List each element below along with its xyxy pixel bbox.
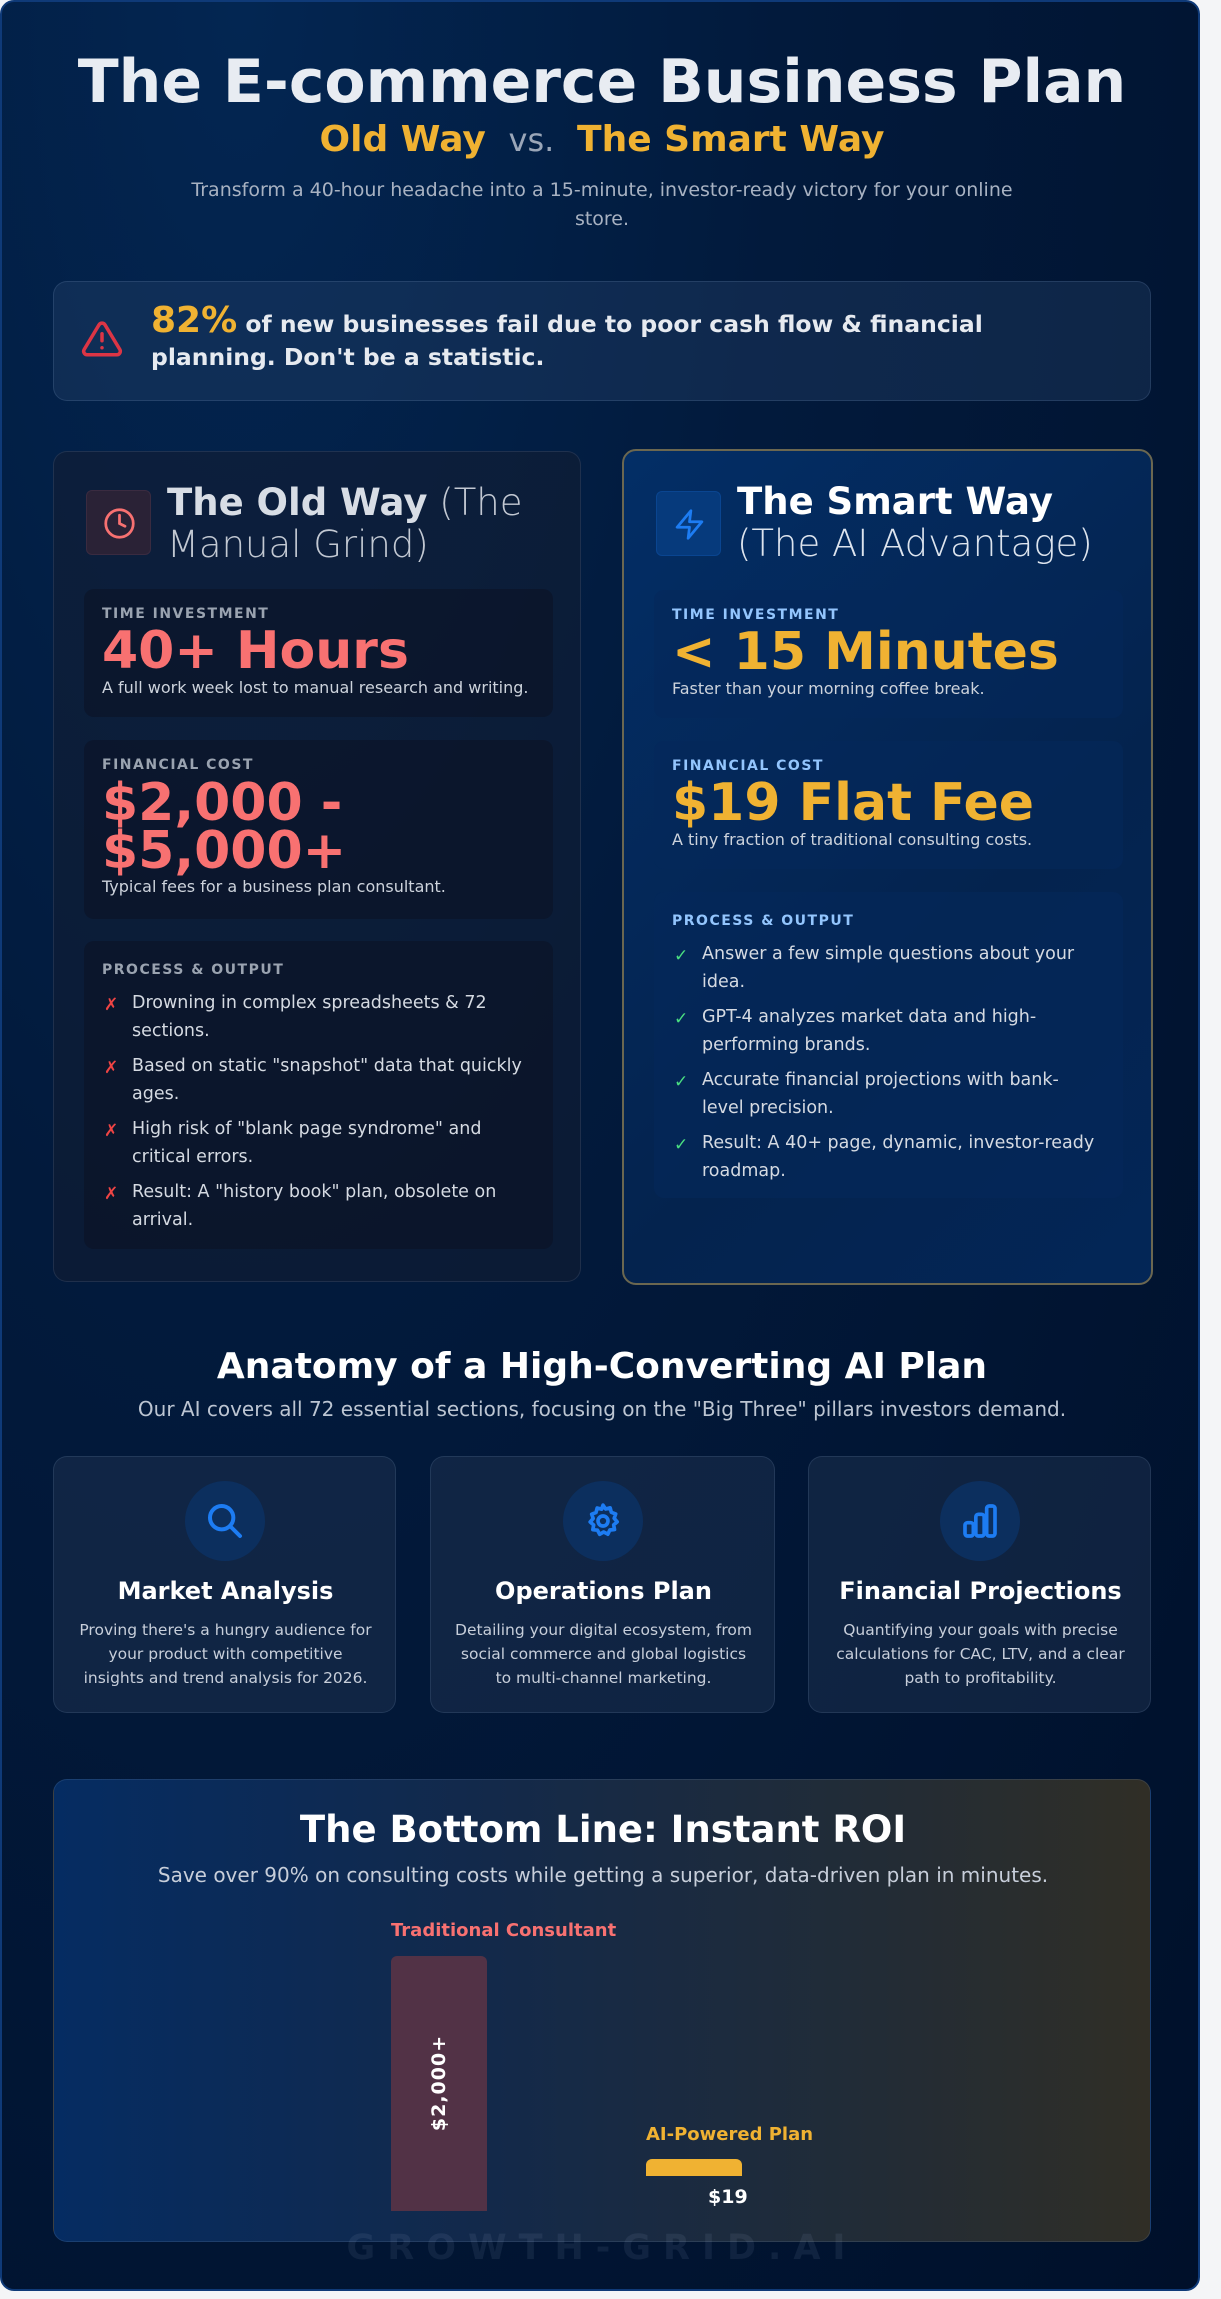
time investment box smart: TIME INVESTMENT — [672, 607, 839, 623]
watermark: GROWTH-GRID.AI — [347, 2228, 857, 2268]
bar: traditional consultant — [391, 1920, 616, 2211]
process list old: ✗ — [104, 995, 118, 1015]
card: financial projections: Financial Projections — [839, 1577, 1122, 1605]
process list old: ✗ — [104, 1058, 118, 1078]
icon: lightning — [656, 491, 721, 556]
financial cost box: FINANCIAL COST — [102, 757, 254, 773]
card: operations plan: Detailing your digital ecosystem, from social commerce and global logistics to multi-channel marketing. — [455, 1621, 752, 1687]
process list old: PROCESS & OUTPUT — [102, 962, 284, 978]
financial cost box smart — [654, 741, 1123, 869]
ROI subtitle: Save over 90% on consulting costs while getting a superior, data-driven plan in minutes. — [158, 1863, 1048, 1887]
process list old: Based on static "snapshot" data that quickly ages. — [132, 1056, 522, 1104]
bar chart — [391, 1920, 813, 2211]
time investment box: A full work week lost to manual research and writing. — [102, 678, 528, 697]
financial cost box: Typical fees for a business plan consultant. — [102, 877, 446, 896]
process list smart: Answer a few simple questions about your idea. — [702, 944, 1074, 992]
process list old — [84, 941, 553, 1249]
subtitle: Old Way vs. The Smart Way — [320, 119, 884, 160]
tagline: Transform a 40-hour headache into a 15-minute, investor-ready victory for your online store. — [191, 179, 1013, 230]
alert text: 82% of new businesses fail due to poor cash flow & financial planning. Don't be a statistic. — [151, 300, 983, 371]
icon: gear — [563, 1481, 643, 1561]
card: financial projections — [808, 1456, 1151, 1713]
financial cost box: $5,000+ — [102, 821, 346, 881]
heading: ROI: The Bottom Line: Instant ROI — [300, 1808, 906, 1851]
process list old: ✗ — [104, 1184, 118, 1204]
bar: AI plan — [646, 2124, 813, 2208]
card: market analysis — [53, 1456, 396, 1713]
time investment box smart — [654, 590, 1123, 718]
process list smart — [654, 892, 1123, 1198]
time investment box smart: Faster than your morning coffee break. — [672, 679, 985, 698]
process list old: ✗ — [104, 1121, 118, 1141]
icon: warning — [82, 321, 122, 356]
card: market analysis: Proving there's a hungry audience for your product with competitive insights and trend analysis for 2026. — [79, 1621, 372, 1687]
panel: smart way — [622, 449, 1153, 1285]
heading: smart way: (The AI Advantage) — [737, 522, 1093, 565]
alert box — [53, 281, 1151, 401]
card: operations plan: Operations Plan — [495, 1577, 712, 1605]
heading: old way: The Old Way (The Manual Grind) — [167, 481, 523, 566]
financial cost box smart: $19 Flat Fee — [672, 773, 1034, 833]
process list old: Result: A "history book" plan, obsolete on arrival. — [132, 1182, 496, 1230]
bar: AI plan: AI-Powered Plan — [646, 2124, 813, 2145]
card: market analysis: Market Analysis — [118, 1577, 333, 1605]
process list smart: ✓ — [674, 946, 688, 966]
financial cost box smart: A tiny fraction of traditional consulting costs. — [672, 830, 1032, 849]
icon: bar chart — [940, 1481, 1020, 1561]
bar: traditional consultant: Traditional Consultant — [391, 1920, 616, 1941]
process list smart: ✓ — [674, 1135, 688, 1155]
panel: old way — [53, 451, 581, 1282]
panel: bottom line ROI — [53, 1779, 1151, 2242]
icon: search — [185, 1481, 265, 1561]
process list old: Drowning in complex spreadsheets & 72 sections. — [132, 993, 487, 1041]
process list smart: Result: A 40+ page, dynamic, investor-ready roadmap. — [702, 1133, 1094, 1181]
icon: clock — [86, 490, 151, 555]
card: operations plan — [430, 1456, 775, 1713]
card: financial projections: Quantifying your goals with precise calculations for CAC, LTV, and a clear path to profitability. — [836, 1621, 1125, 1687]
heading: anatomy: Anatomy of a High-Converting AI Plan — [217, 1346, 987, 1387]
bar: traditional consultant: $2,000+ — [428, 2035, 450, 2131]
process list smart: GPT-4 analyzes market data and high-performing brands. — [702, 1007, 1036, 1055]
time investment box: 40+ Hours — [102, 621, 409, 681]
anatomy subtitle: Our AI covers all 72 essential sections, focusing on the "Big Three" pillars investors demand. — [138, 1397, 1066, 1421]
financial cost box: $2,000 - — [102, 773, 342, 833]
process list old: High risk of "blank page syndrome" and critical errors. — [132, 1119, 481, 1167]
financial cost box — [84, 740, 553, 919]
process list smart: PROCESS & OUTPUT — [672, 913, 854, 929]
time investment box smart: < 15 Minutes — [672, 622, 1059, 682]
heading: smart way — [737, 480, 1093, 565]
heading: smart way: The Smart Way — [737, 480, 1053, 523]
time investment box: TIME INVESTMENT — [102, 606, 269, 622]
bar: AI plan: $19 — [708, 2186, 748, 2208]
process list smart: ✓ — [674, 1009, 688, 1029]
financial cost box smart: FINANCIAL COST — [672, 758, 824, 774]
title: The E-commerce Business Plan — [78, 47, 1126, 117]
time investment box — [84, 589, 553, 717]
process list smart: ✓ — [674, 1072, 688, 1092]
process list smart: Accurate financial projections with bank-level precision. — [702, 1070, 1059, 1118]
